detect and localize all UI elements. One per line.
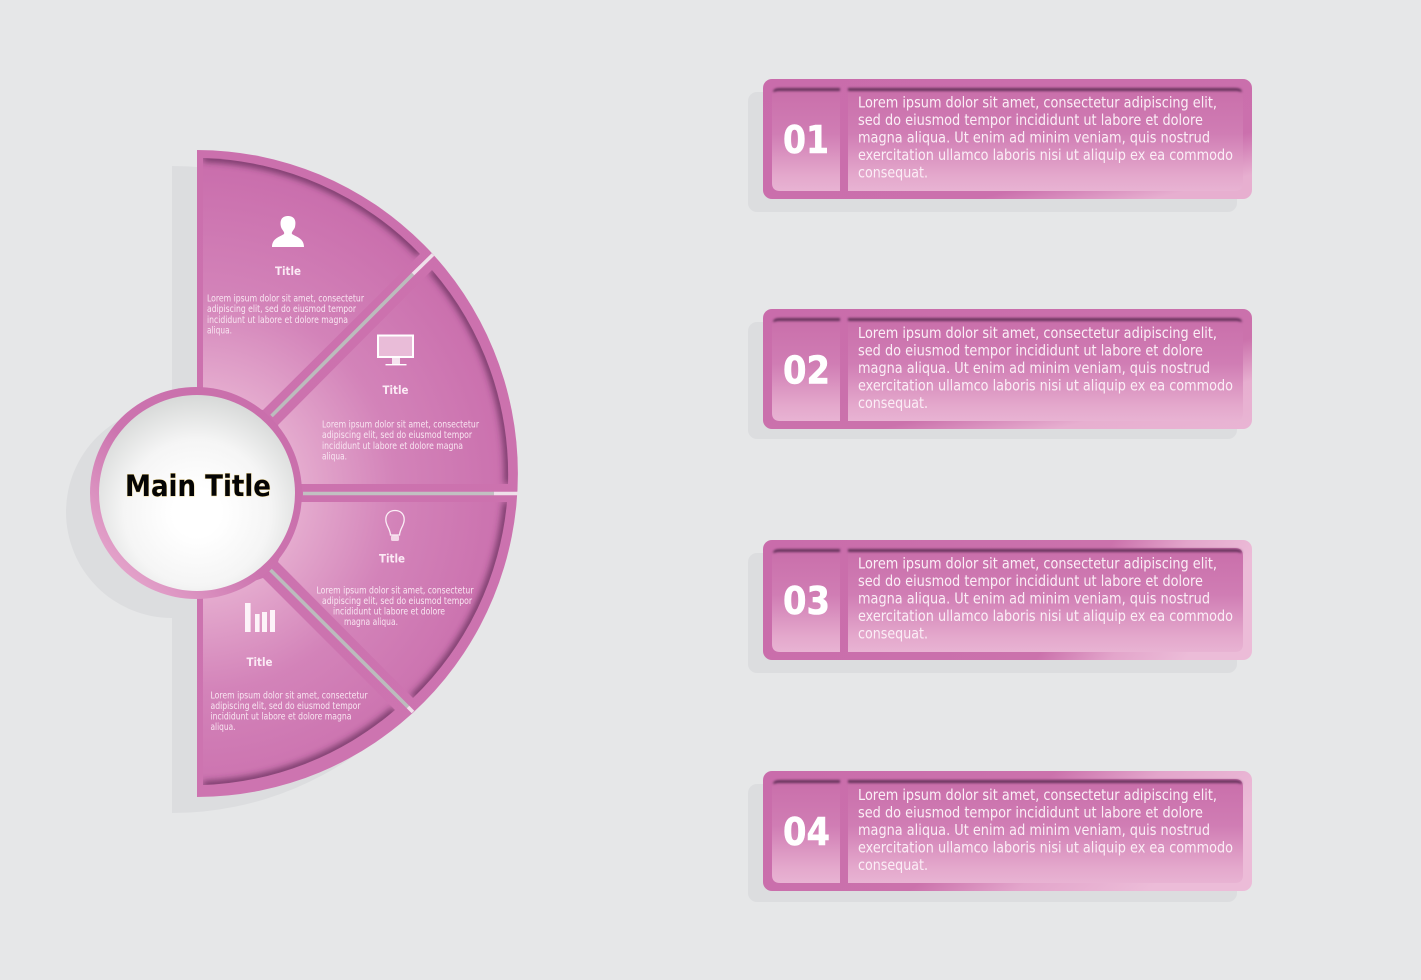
center circle <box>90 387 302 599</box>
segment 4 title: Title <box>246 655 273 669</box>
card 02 text: consequat. <box>858 394 928 412</box>
segment 3 text: Lorem ipsum dolor sit amet, consectetur <box>316 586 474 596</box>
card 01 frame <box>763 79 1252 199</box>
card 04 text: sed do eiusmod tempor incididunt ut labore et dolore <box>858 804 1203 822</box>
card 01 text: sed do eiusmod tempor incididunt ut labore et dolore <box>858 111 1203 129</box>
card 04 top inner shadow <box>773 780 1242 784</box>
segment 3 background <box>278 502 507 698</box>
card 03 <box>748 540 1252 673</box>
card 02 frame <box>763 309 1252 429</box>
segment 1 inner shadow <box>203 158 420 254</box>
card 04 frame <box>763 771 1252 891</box>
segment 4 text: adipiscing elit, sed do eiusmod tempor <box>210 701 361 712</box>
segment 3 text: adipiscing elit, sed do eiusmod tempor <box>322 596 472 607</box>
card 02 text: exercitation ullamco laboris nisi ut aliquip ex ea commodo <box>858 376 1233 394</box>
card 03 frame <box>763 540 1252 660</box>
card 04 shadow <box>748 784 1237 902</box>
card 03 text: magna aliqua. Ut enim ad minim veniam, quis nostrud <box>858 590 1210 608</box>
card 02 text <box>858 324 1233 412</box>
segment 3 title: Title <box>379 552 405 566</box>
circle ring <box>90 387 302 599</box>
card 02 shadow <box>748 322 1237 439</box>
segment 2 title: Title <box>382 383 409 397</box>
segment 4 text <box>210 690 368 733</box>
card 01 <box>748 79 1252 212</box>
segment 2 background <box>278 270 508 484</box>
card 01 top inner shadow <box>773 88 1242 92</box>
segment 3 <box>278 502 507 698</box>
diagram drop shadow <box>66 166 493 813</box>
card 04 <box>748 771 1252 902</box>
card 01 text: Lorem ipsum dolor sit amet, consectetur adipiscing elit, <box>858 94 1217 112</box>
segment 3 text <box>316 586 474 628</box>
segment 4 <box>203 578 395 785</box>
semicircle diagram <box>66 150 518 813</box>
card 01 text: magna aliqua. Ut enim ad minim veniam, quis nostrud <box>858 128 1210 146</box>
card 02 text: Lorem ipsum dolor sit amet, consectetur adipiscing elit, <box>858 324 1217 342</box>
segment 3 inner shadow <box>413 502 507 698</box>
card 01 shadow <box>748 92 1237 212</box>
segment dividers <box>270 254 518 712</box>
segment 4 text: incididunt ut labore et dolore magna <box>210 712 352 722</box>
icon: light bulb <box>386 510 404 541</box>
card 02 <box>748 309 1252 439</box>
icon: monitor <box>378 336 413 365</box>
card 03 text: consequat. <box>858 624 928 642</box>
segment 1 <box>203 158 420 410</box>
segment 2 <box>278 270 508 484</box>
segment 2 inner shadow <box>432 270 508 484</box>
segment 2 text <box>322 420 479 462</box>
segment 2 text: Lorem ipsum dolor sit amet, consectetur <box>322 420 479 430</box>
segment 4 text: Lorem ipsum dolor sit amet, consectetur <box>210 690 368 702</box>
icon: person <box>272 216 304 247</box>
card 02 top inner shadow <box>773 318 1242 322</box>
card 03 top inner shadow <box>773 549 1242 553</box>
card 03 text: exercitation ullamco laboris nisi ut aliquip ex ea commodo <box>858 607 1233 625</box>
card 04 text: consequat. <box>858 856 928 874</box>
segment 1 text: Lorem ipsum dolor sit amet, consectetur <box>207 294 364 304</box>
card 03 shadow <box>748 553 1237 673</box>
segment 2 text: incididunt ut labore et dolore magna <box>322 441 463 452</box>
segment 4 background <box>203 578 395 785</box>
card 02 number: 02 <box>783 348 830 392</box>
card 01 text panel <box>848 87 1243 191</box>
card 04 text <box>858 786 1233 874</box>
icon: bar chart <box>245 603 275 632</box>
card 04 text: exercitation ullamco laboris nisi ut aliquip ex ea commodo <box>858 838 1233 856</box>
circle face <box>99 395 295 591</box>
segment 1 background <box>203 158 420 410</box>
segment 4 text: aliqua. <box>210 722 236 733</box>
segment 4 inner shadow <box>203 710 395 785</box>
segment 2 text: aliqua. <box>322 452 347 462</box>
card 01 text: exercitation ullamco laboris nisi ut aliquip ex ea commodo <box>858 146 1233 164</box>
segment 1 text: adipiscing elit, sed do eiusmod tempor <box>207 304 356 315</box>
card 04 text: magna aliqua. Ut enim ad minim veniam, quis nostrud <box>858 821 1210 839</box>
main title: Main Title <box>125 469 271 503</box>
fan outer ring <box>197 150 518 797</box>
card 01 number panel <box>772 87 840 191</box>
card 03 number panel <box>772 548 840 652</box>
card 02 text: sed do eiusmod tempor incididunt ut labore et dolore <box>858 342 1203 360</box>
card 03 number: 03 <box>783 579 830 623</box>
card 01 text <box>858 94 1233 182</box>
card 04 text panel <box>848 779 1243 883</box>
card 03 text: sed do eiusmod tempor incididunt ut labore et dolore <box>858 572 1203 590</box>
segment 1 text: incididunt ut labore et dolore magna <box>207 315 348 326</box>
card 03 text panel <box>848 548 1243 652</box>
card 02 text: magna aliqua. Ut enim ad minim veniam, quis nostrud <box>858 359 1210 377</box>
card 04 number panel <box>772 779 840 883</box>
segment 3 text: magna aliqua. <box>344 617 398 628</box>
segment 1 title: Title <box>275 264 301 278</box>
card 04 text: Lorem ipsum dolor sit amet, consectetur adipiscing elit, <box>858 786 1217 804</box>
segment 1 text: aliqua. <box>207 326 232 336</box>
card 03 text: Lorem ipsum dolor sit amet, consectetur adipiscing elit, <box>858 554 1217 572</box>
card 02 number panel <box>772 317 840 421</box>
card 01 text: consequat. <box>858 164 928 182</box>
card 03 text <box>858 554 1233 642</box>
segment 1 text <box>207 294 364 336</box>
card 02 text panel <box>848 317 1243 421</box>
card 01 number: 01 <box>783 118 829 162</box>
segment 2 text: adipiscing elit, sed do eiusmod tempor <box>322 430 472 441</box>
card 04 number: 04 <box>783 810 830 854</box>
segment 3 text: incididunt ut labore et dolore <box>333 606 445 618</box>
